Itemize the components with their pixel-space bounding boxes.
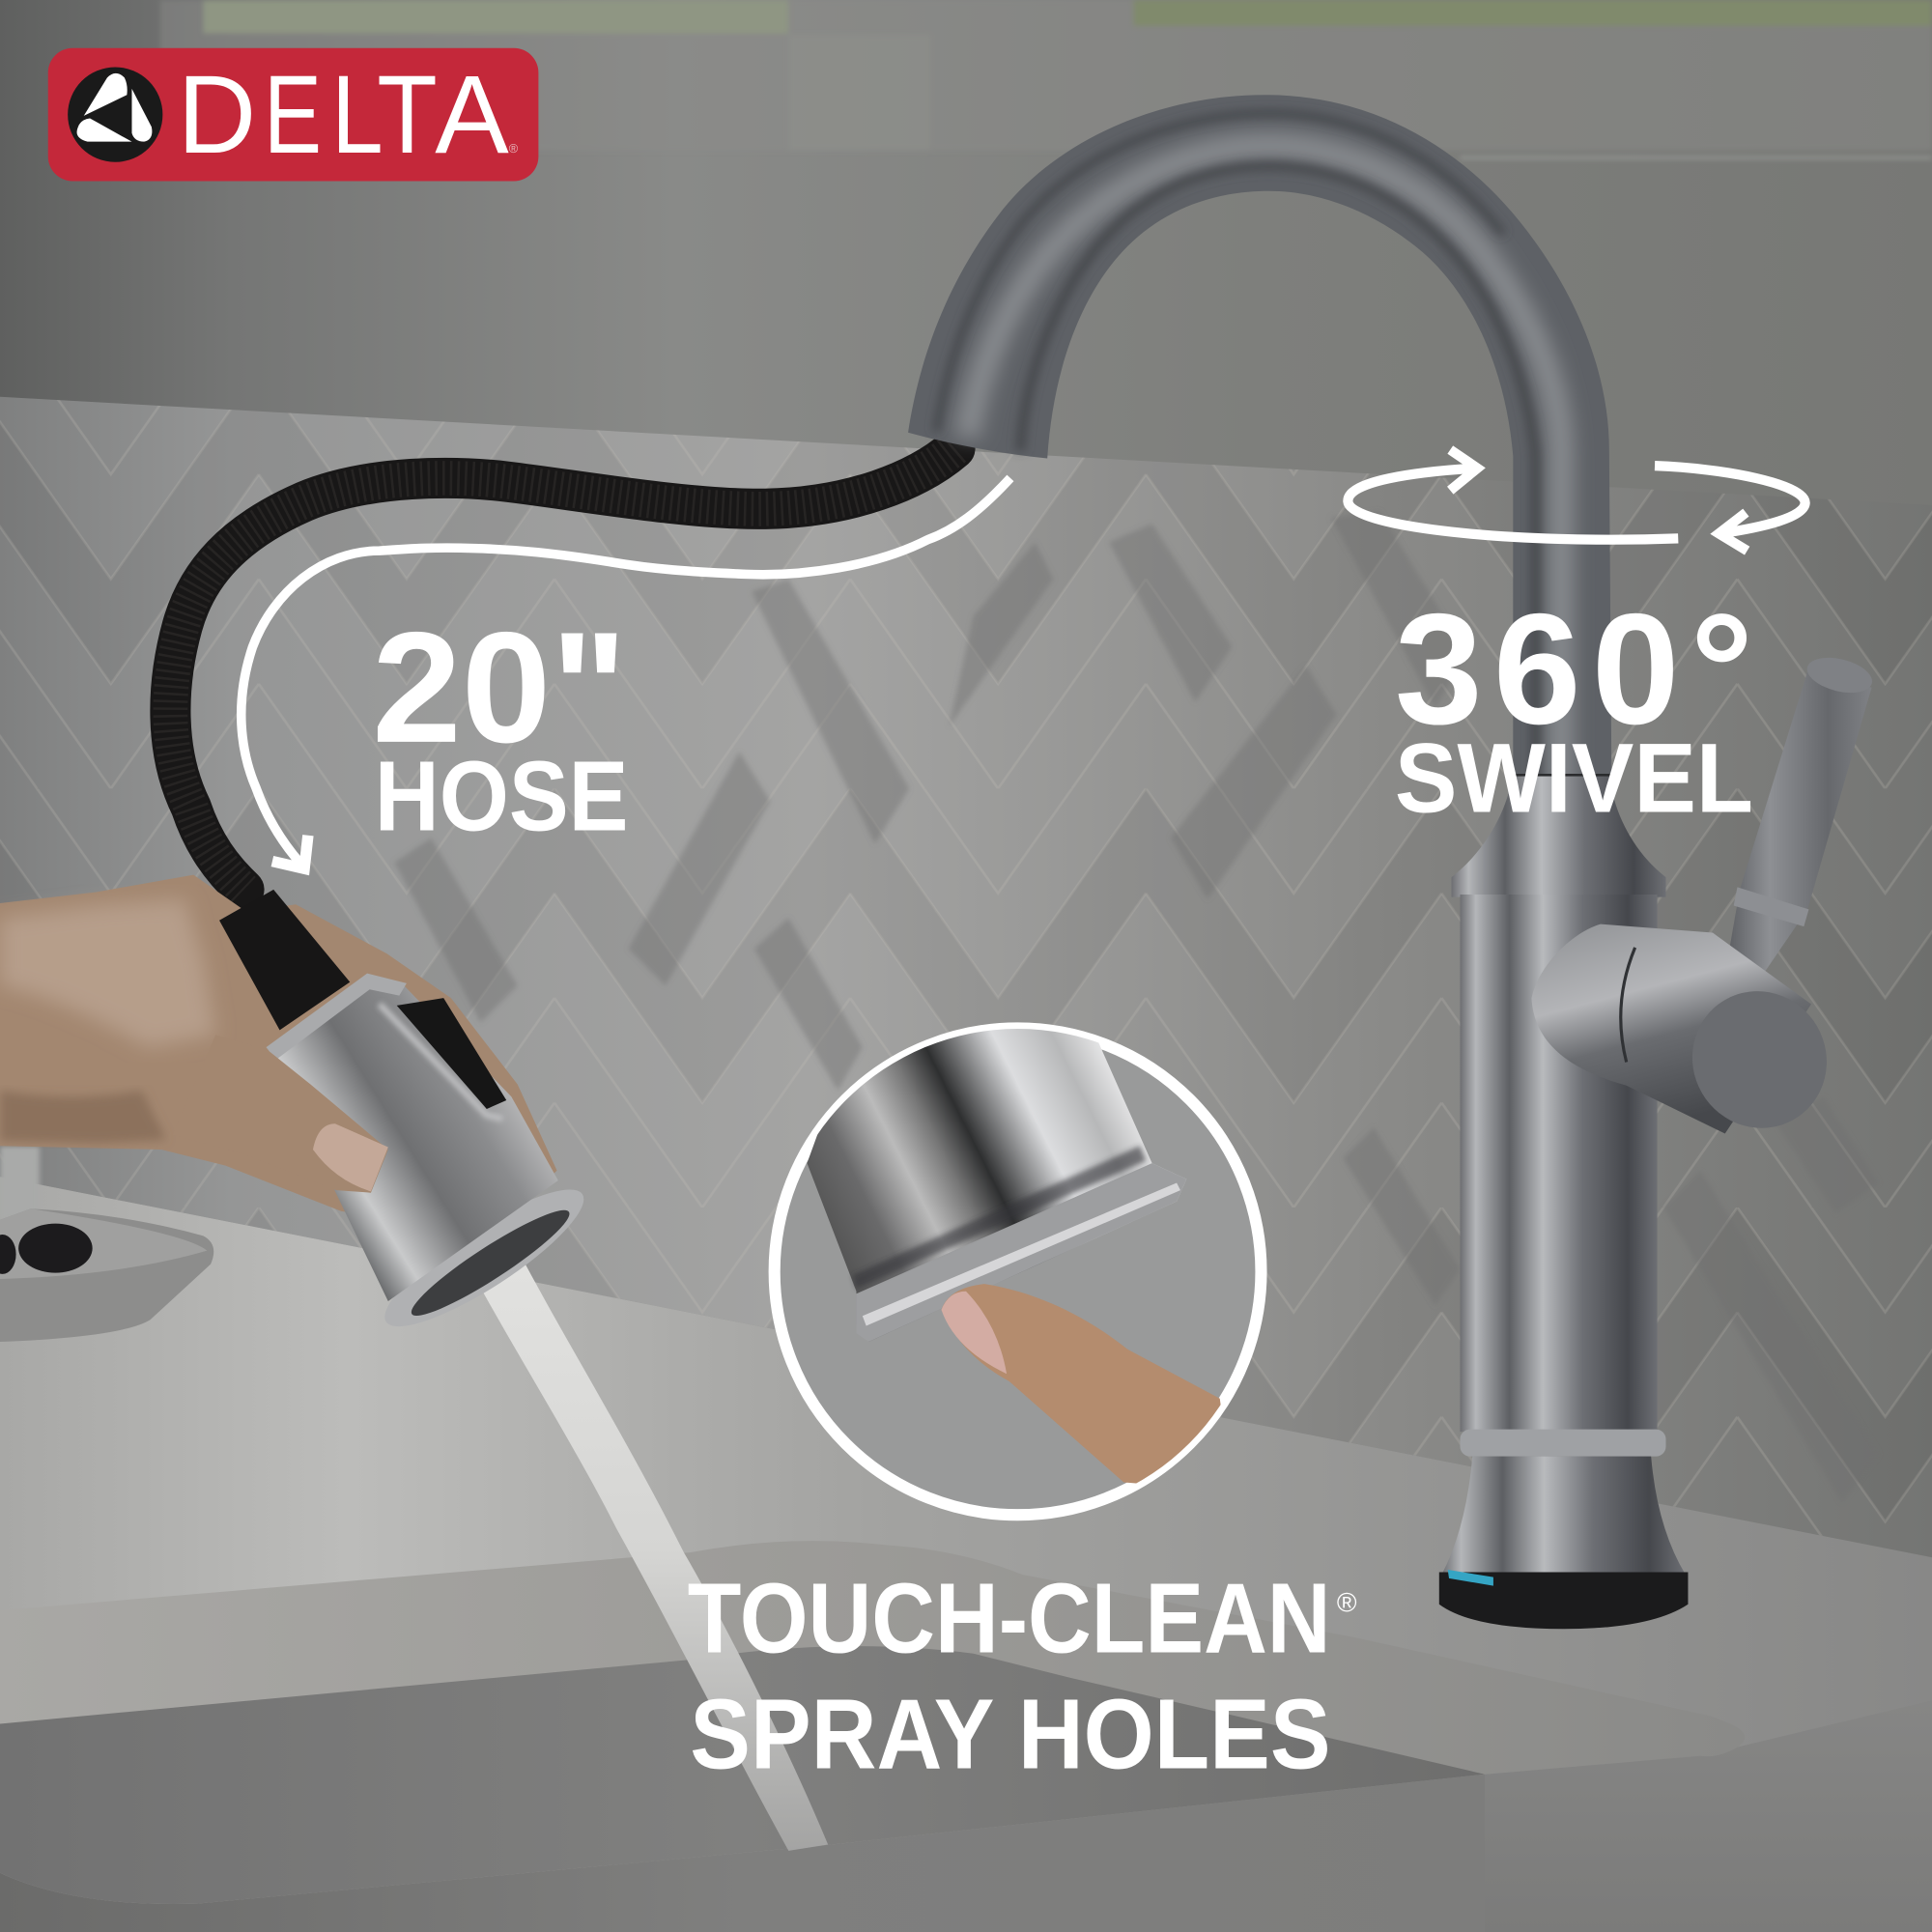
handle disc (1667, 967, 1852, 1152)
hose connector (219, 890, 350, 1030)
swivel arrow (1348, 450, 1805, 551)
logo wordmark: E (264, 53, 322, 177)
logo wordmark: D (178, 53, 256, 177)
logo mark (68, 68, 162, 162)
front counter right (1485, 1700, 1932, 1932)
column collar flare (1452, 774, 1665, 897)
label: touch-clean spray holes: TOUCH-CLEAN (688, 1561, 1331, 1673)
swivel seam (1509, 774, 1610, 777)
sprayer close-up (807, 1010, 1186, 1342)
finger (941, 1284, 1233, 1491)
darker marble tiles (394, 511, 1879, 1503)
label: touch-clean spray holes (688, 1561, 1357, 1789)
logo wordmark (178, 53, 509, 177)
undermount sink (0, 1541, 1932, 1932)
logo (48, 48, 538, 181)
label: 360 swivel: 360° (1395, 581, 1753, 757)
label: 20 inch hose: 20" (372, 599, 627, 776)
label: 20 inch hose (372, 599, 629, 852)
label: 360 swivel (1395, 581, 1753, 834)
hub seam (1621, 948, 1635, 1062)
front counter (0, 1775, 1485, 1932)
logo wordmark: L (331, 53, 384, 177)
label: touch-clean spray holes: SPRAY HOLES (690, 1677, 1331, 1789)
bowl with berries (0, 1146, 213, 1342)
button housing outline (380, 1005, 502, 1119)
window and sill (160, 0, 1932, 159)
label: 20 inch hose: HOSE (375, 740, 629, 852)
hose (170, 448, 955, 890)
flared base (1441, 1457, 1686, 1575)
lever cap (1804, 652, 1876, 698)
hose length arrow (242, 478, 1010, 868)
hand behind sprayer (0, 875, 557, 1233)
base collar (1460, 1430, 1665, 1457)
fingernail (941, 1292, 1007, 1374)
faucet (908, 95, 1876, 1629)
blue LED (1448, 1570, 1493, 1586)
thumbnail (313, 1123, 388, 1191)
close-up rim (856, 1163, 1186, 1342)
thumb (173, 1035, 388, 1193)
sink rim (0, 1541, 1745, 1932)
lever ring (1734, 887, 1808, 926)
faucet body (1460, 895, 1658, 1432)
label: touch-clean spray holes: ® (1337, 1587, 1357, 1617)
gooseneck spout (908, 95, 1611, 788)
top ring (267, 974, 407, 1060)
shadow above rim (853, 1146, 1146, 1289)
black touch base (1439, 1573, 1688, 1629)
sink basin (0, 1646, 1485, 1904)
inset detail circle (775, 1010, 1261, 1515)
countertop (0, 1177, 1932, 1932)
handle hub (1531, 924, 1811, 1133)
sprayer head (173, 890, 599, 1347)
registered mark: ® (509, 141, 519, 156)
logo wordmark: T (377, 53, 438, 177)
handle lever (1726, 652, 1876, 980)
nozzle ring (370, 1170, 599, 1347)
spray button (397, 998, 506, 1109)
sprayer body (269, 976, 558, 1301)
marble herringbone backsplash (0, 397, 1932, 1557)
logo wordmark: A (435, 53, 509, 177)
label: 360 swivel: SWIVEL (1395, 724, 1753, 834)
water stream (474, 1249, 828, 1851)
